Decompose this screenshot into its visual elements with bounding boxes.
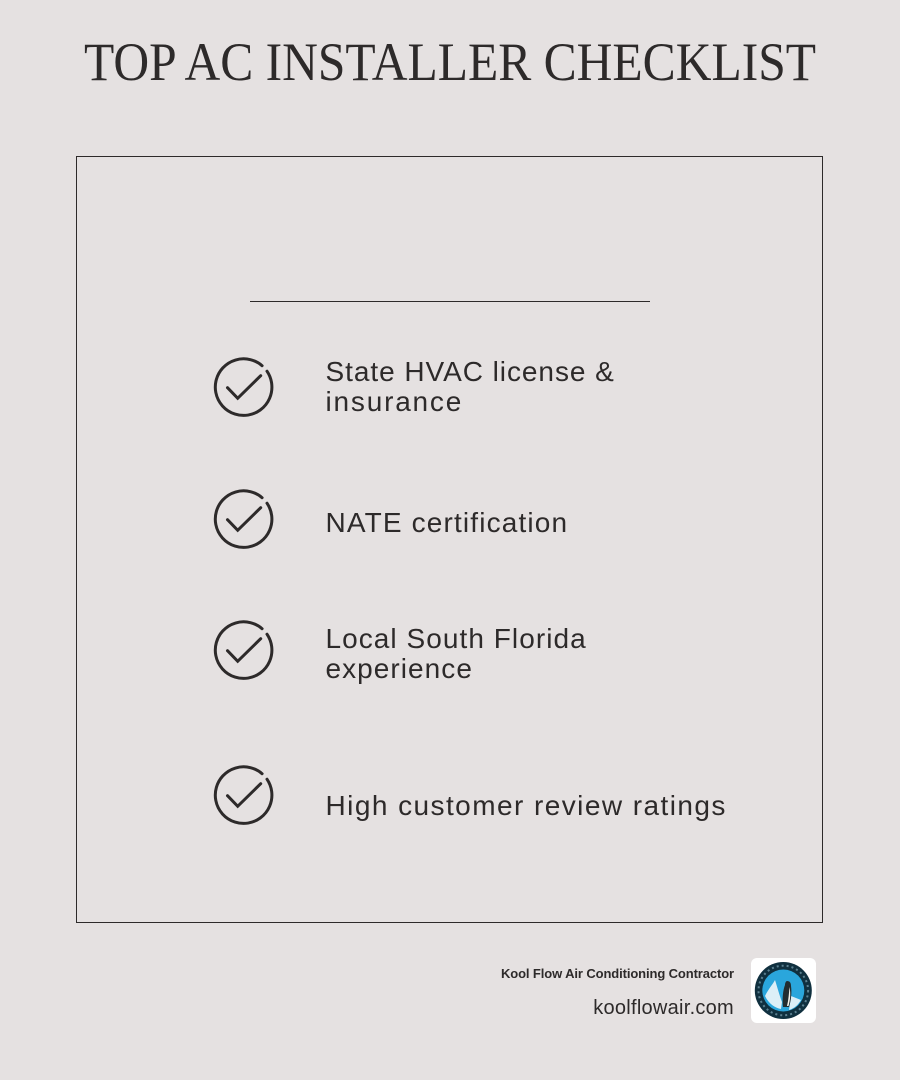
text: license: State HVAC license & [326,356,615,387]
icon: check 3 [214,620,274,680]
website: koolflowair.com [593,997,734,1019]
icon: check 4 [214,765,274,825]
title: TOP AC INSTALLER CHECKLIST [84,32,816,92]
logo [751,958,816,1023]
text: reviews: High customer review ratings [326,790,727,821]
text: license [326,356,615,417]
icon: check 2 [214,489,274,549]
company name: Kool Flow Air Conditioning Contractor [501,966,734,981]
icon: check 1 [214,357,274,417]
text: license: insurance [326,386,463,417]
panel: checklist [76,156,823,923]
text: local experience: Local South Florida [326,623,587,654]
text: local experience: experience [326,653,473,684]
text: NATE: NATE certification [326,507,568,538]
divider line [250,301,650,302]
text: local experience [326,623,587,684]
